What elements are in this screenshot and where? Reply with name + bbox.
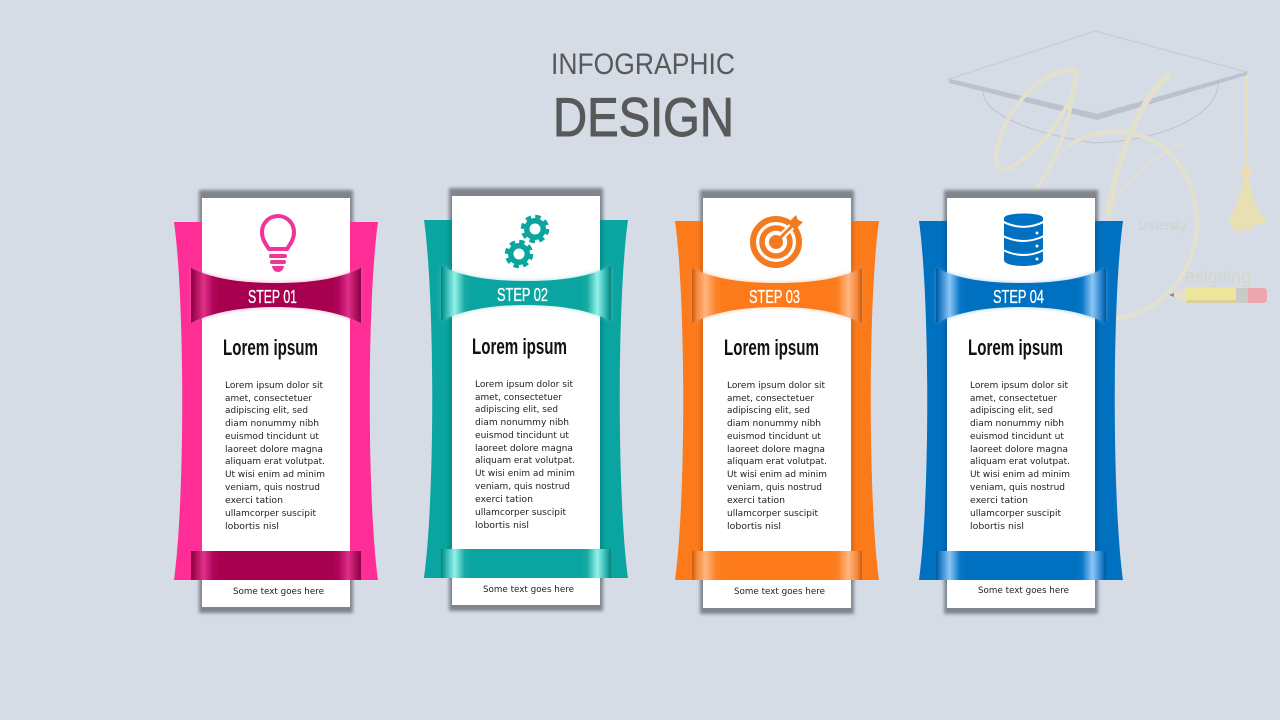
body text: amet, consectetuer	[727, 394, 814, 404]
body text: veniam, quis nostrud	[475, 482, 570, 492]
body text: aliquam erat volutpat.	[475, 456, 575, 466]
body text: aliquam erat volutpat.	[727, 457, 827, 467]
body text	[727, 381, 827, 532]
title line: INFOGRAPHIC: INFOGRAPHIC	[551, 48, 735, 81]
body text: exerci tation	[727, 496, 785, 506]
ribbon glow	[692, 268, 862, 323]
heading: Lorem ipsum	[223, 335, 318, 360]
card shadow	[944, 190, 1098, 614]
panel: step 02	[424, 188, 628, 611]
watermark: graduation cap logo	[949, 31, 1268, 318]
watermark: tassel	[1229, 76, 1268, 233]
body text: veniam, quis nostrud	[727, 483, 822, 493]
body text: veniam, quis nostrud	[225, 483, 320, 493]
footer text: Some text goes here	[978, 586, 1069, 596]
back shape	[174, 222, 378, 580]
bottom band	[441, 549, 611, 578]
ribbon glow	[936, 268, 1106, 323]
back shape	[675, 221, 879, 580]
body text: aliquam erat volutpat.	[225, 457, 325, 467]
body text	[225, 381, 325, 532]
body text: Ut wisi enim ad minim	[970, 470, 1070, 480]
icon: target with arrow	[753, 215, 803, 265]
body text: adipiscing elit, sed	[970, 406, 1053, 416]
ribbon glow	[191, 268, 361, 323]
body text	[475, 380, 575, 531]
body text: euismod tincidunt ut	[225, 432, 320, 442]
card shadow	[199, 190, 353, 613]
title	[551, 48, 735, 148]
watermark: cap board	[949, 31, 1247, 143]
body text: Lorem ipsum dolor sit	[970, 381, 1069, 391]
step label: STEP 01	[248, 286, 297, 307]
body text: laoreet dolore magna	[225, 445, 323, 455]
ribbon	[936, 268, 1106, 323]
heading: Lorem ipsum	[968, 335, 1063, 360]
body text: ullamcorper suscipit	[970, 509, 1062, 519]
back shape	[424, 220, 628, 578]
white card	[947, 198, 1095, 608]
body text: exerci tation	[475, 495, 533, 505]
body text: lobortis nisl	[970, 522, 1024, 532]
body text: diam nonummy nibh	[727, 419, 821, 429]
watermark: Designing text: esigning	[1185, 266, 1251, 288]
bottom band	[936, 551, 1106, 580]
body text: diam nonummy nibh	[475, 418, 569, 428]
ribbon	[692, 268, 862, 323]
body text: Lorem ipsum dolor sit	[475, 380, 574, 390]
body text: exerci tation	[225, 496, 283, 506]
icon: database	[1003, 214, 1044, 266]
body text: adipiscing elit, sed	[727, 406, 810, 416]
heading: Lorem ipsum	[724, 335, 819, 360]
body text: amet, consectetuer	[970, 394, 1057, 404]
panel: step 04	[919, 190, 1123, 614]
body text: adipiscing elit, sed	[225, 406, 308, 416]
icon: light bulb	[262, 216, 294, 272]
body text: amet, consectetuer	[475, 393, 562, 403]
watermark: pencil	[1169, 288, 1267, 303]
body text: Lorem ipsum dolor sit	[727, 381, 826, 391]
body text: diam nonummy nibh	[970, 419, 1064, 429]
ribbon glow	[441, 266, 611, 321]
body text: euismod tincidunt ut	[970, 432, 1065, 442]
title line: DESIGN: DESIGN	[553, 86, 734, 148]
card shadow	[700, 190, 854, 614]
body text: exerci tation	[970, 496, 1028, 506]
body text: Lorem ipsum dolor sit	[225, 381, 324, 391]
side shade	[944, 222, 1098, 580]
body text: Ut wisi enim ad minim	[225, 470, 325, 480]
card shadow	[449, 188, 603, 611]
watermark: University text: University	[1138, 217, 1186, 234]
ribbon	[191, 268, 361, 323]
body text: laoreet dolore magna	[727, 445, 825, 455]
body text: amet, consectetuer	[225, 394, 312, 404]
back shape	[919, 221, 1123, 580]
body text: euismod tincidunt ut	[727, 432, 822, 442]
bottom band	[692, 551, 862, 580]
footer text: Some text goes here	[734, 587, 825, 597]
footer text: Some text goes here	[233, 587, 324, 597]
icon: gears	[506, 216, 548, 266]
step label: STEP 02	[497, 284, 548, 305]
body text: ullamcorper suscipit	[475, 508, 567, 518]
ribbon	[441, 266, 611, 321]
panel: step 03	[675, 190, 879, 614]
step label: STEP 04	[993, 286, 1044, 307]
body text: lobortis nisl	[727, 522, 781, 532]
body text: adipiscing elit, sed	[475, 405, 558, 415]
body text: laoreet dolore magna	[475, 444, 573, 454]
body text: Ut wisi enim ad minim	[475, 469, 575, 479]
bottom band	[191, 551, 361, 580]
side shade	[700, 222, 854, 580]
watermark: script monogram	[996, 70, 1197, 318]
body text: euismod tincidunt ut	[475, 431, 570, 441]
body text: diam nonummy nibh	[225, 419, 319, 429]
body text: aliquam erat volutpat.	[970, 457, 1070, 467]
body text: ullamcorper suscipit	[727, 509, 819, 519]
body text	[970, 381, 1070, 532]
body text: laoreet dolore magna	[970, 445, 1068, 455]
white card	[452, 196, 600, 605]
white card	[202, 198, 350, 607]
body text: veniam, quis nostrud	[970, 483, 1065, 493]
body text: lobortis nisl	[475, 521, 529, 531]
panel: step 01	[174, 190, 378, 613]
body text: lobortis nisl	[225, 522, 279, 532]
white card	[703, 198, 851, 608]
body text: ullamcorper suscipit	[225, 509, 317, 519]
side shade	[449, 220, 603, 578]
footer text: Some text goes here	[483, 585, 574, 595]
body text: Ut wisi enim ad minim	[727, 470, 827, 480]
heading: Lorem ipsum	[472, 334, 567, 359]
step label: STEP 03	[749, 286, 800, 307]
